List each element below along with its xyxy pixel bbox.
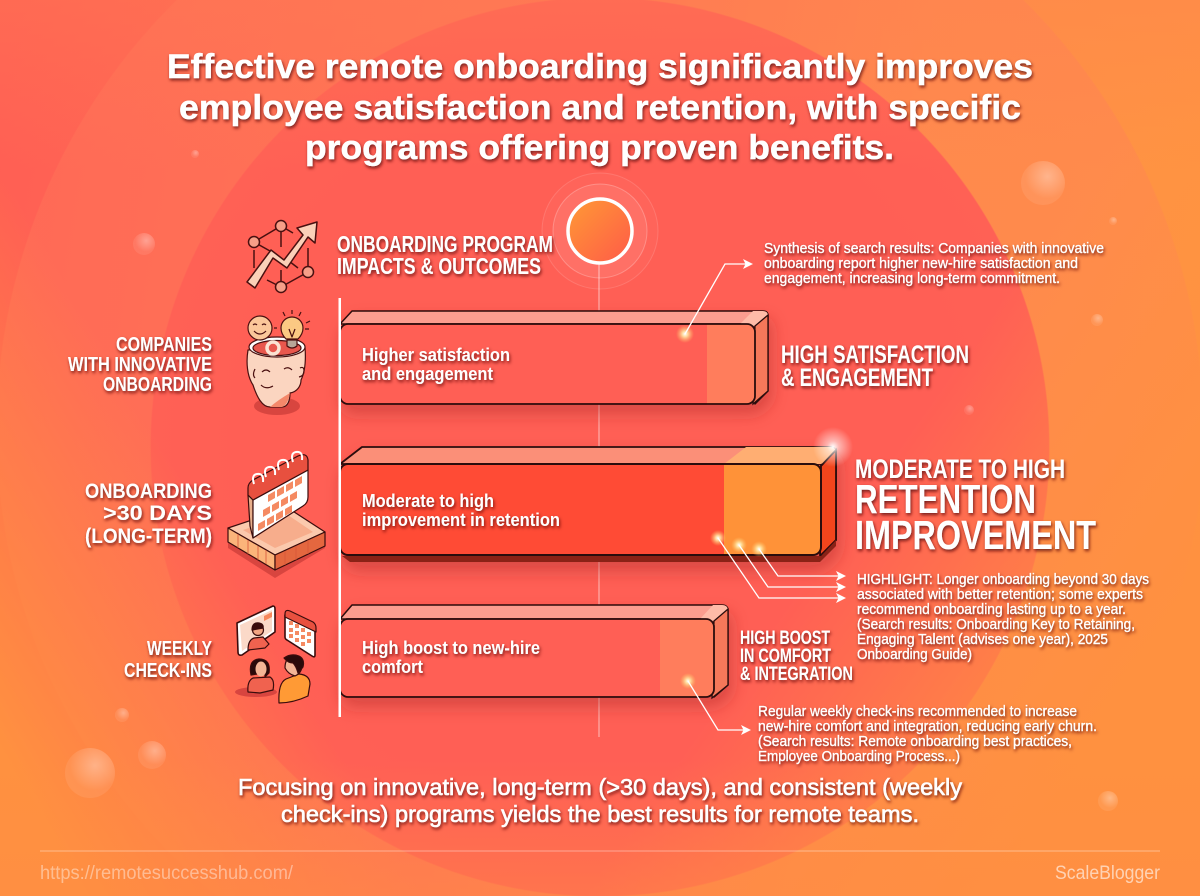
bar 2 highlight note xyxy=(857,571,1149,663)
conclusion text: Focusing on innovative, long-term (>30 days), and consistent (weekly xyxy=(238,774,962,800)
icon: calendar on platform xyxy=(228,452,325,578)
bar 2 highlight note: recommend onboarding lasting up to a year. xyxy=(857,601,1126,618)
bar 1 outcome: & ENGAGEMENT xyxy=(781,364,933,392)
title xyxy=(167,48,1033,167)
bar 2 outcome xyxy=(855,454,1096,558)
bar 3 outcome: IN COMFORT xyxy=(740,646,831,667)
icon: people and check-in panels xyxy=(235,606,316,703)
bar 1 note: engagement, increasing long-term commitment. xyxy=(764,270,1060,287)
bar 1 text: Higher satisfaction xyxy=(362,345,510,365)
center timeline line xyxy=(598,262,600,737)
row 2: long-term onboarding xyxy=(85,427,1149,663)
icon: network with rising arrow xyxy=(247,220,317,292)
bar 2 text xyxy=(362,491,560,530)
title: programs offering proven benefits. xyxy=(305,129,894,167)
row 1: innovative onboarding xyxy=(68,240,1104,415)
bar 2 outcome: RETENTION xyxy=(855,476,1036,522)
row 3 label: WEEKLY xyxy=(147,638,213,660)
bar 3 outcome: & INTEGRATION xyxy=(740,664,853,685)
bar 1 xyxy=(340,311,768,404)
row 1 label: ONBOARDING xyxy=(103,374,212,396)
bar 3 note: Employee Onboarding Process...) xyxy=(758,748,960,765)
footer: https://remotesuccesshub.com/ xyxy=(40,863,294,884)
header: chart title: IMPACTS & OUTCOMES xyxy=(337,253,541,279)
bar 2 xyxy=(340,447,836,562)
icon: glowing circle xyxy=(542,173,658,289)
bar 2 highlight note: Engaging Talent (advises one year), 2025 xyxy=(857,631,1108,648)
footer xyxy=(40,851,1161,884)
bar 1 note xyxy=(764,240,1104,287)
icon: head with ideas xyxy=(247,310,310,415)
title: employee satisfaction and retention, with specific xyxy=(179,89,1021,127)
bar 2 highlight note: (Search results: Onboarding Key to Retaining, xyxy=(857,616,1135,633)
conclusion text: check-ins) programs yields the best results for remote teams. xyxy=(281,801,919,827)
row 1 label: COMPANIES xyxy=(116,334,212,356)
bar 1 outcome: HIGH SATISFACTION xyxy=(781,341,969,369)
bar 1 arrow xyxy=(676,264,751,343)
bar 1 text xyxy=(362,345,510,384)
header: chart title: ONBOARDING PROGRAM xyxy=(337,231,553,257)
bar 1 outcome xyxy=(781,341,969,392)
bar 2 outcome: MODERATE TO HIGH xyxy=(855,454,1065,484)
bar 2 arrows xyxy=(710,530,844,598)
row 1 label xyxy=(68,334,212,396)
bar 3 note: Regular weekly check-ins recommended to increase xyxy=(758,703,1077,720)
bar 3 note: new-hire comfort and integration, reducing early churn. xyxy=(758,718,1097,735)
row 3 label: CHECK-INS xyxy=(124,660,212,682)
header: chart title xyxy=(337,231,553,279)
row 2 label: >30 DAYS xyxy=(103,502,212,525)
row 2 label xyxy=(85,480,212,548)
bar 2 highlight note: Onboarding Guide) xyxy=(857,646,972,663)
bar 2 text: improvement in retention xyxy=(362,510,560,530)
bar 2 highlight note: HIGHLIGHT: Longer onboarding beyond 30 days xyxy=(857,571,1149,588)
row 3: weekly check-ins xyxy=(124,605,1097,765)
bar 3 text: comfort xyxy=(362,657,423,677)
bar 1 note: Synthesis of search results: Companies with innovative xyxy=(764,240,1104,257)
bar 2 highlight note: associated with better retention; some experts xyxy=(857,586,1143,603)
conclusion text xyxy=(238,774,962,827)
row 2 label: ONBOARDING xyxy=(85,480,212,503)
row 2 label: (LONG-TERM) xyxy=(85,525,212,548)
bar 3 outcome: HIGH BOOST xyxy=(740,628,830,649)
bar 3 text: High boost to new-hire xyxy=(362,638,540,658)
bar 3 note xyxy=(758,703,1097,765)
axis line xyxy=(338,298,341,717)
row 3 label xyxy=(124,638,213,682)
title: Effective remote onboarding significantly improves xyxy=(167,48,1033,86)
bar 2 outcome: IMPROVEMENT xyxy=(855,512,1096,558)
bar 3 arrow xyxy=(680,673,749,730)
bar 3 outcome xyxy=(740,628,853,685)
bar 2 text: Moderate to high xyxy=(362,491,494,511)
bar 1 text: and engagement xyxy=(362,364,493,384)
row 1 label: WITH INNOVATIVE xyxy=(68,354,212,376)
bar 1 note: onboarding report higher new-hire satisfaction and xyxy=(764,255,1078,272)
bar 3 text xyxy=(362,638,540,677)
footer: ScaleBlogger xyxy=(1055,863,1161,884)
bar 2 flare xyxy=(813,427,853,467)
bar 3 note: (Search results: Remote onboarding best practices, xyxy=(758,733,1072,750)
bar 3 xyxy=(340,605,728,698)
